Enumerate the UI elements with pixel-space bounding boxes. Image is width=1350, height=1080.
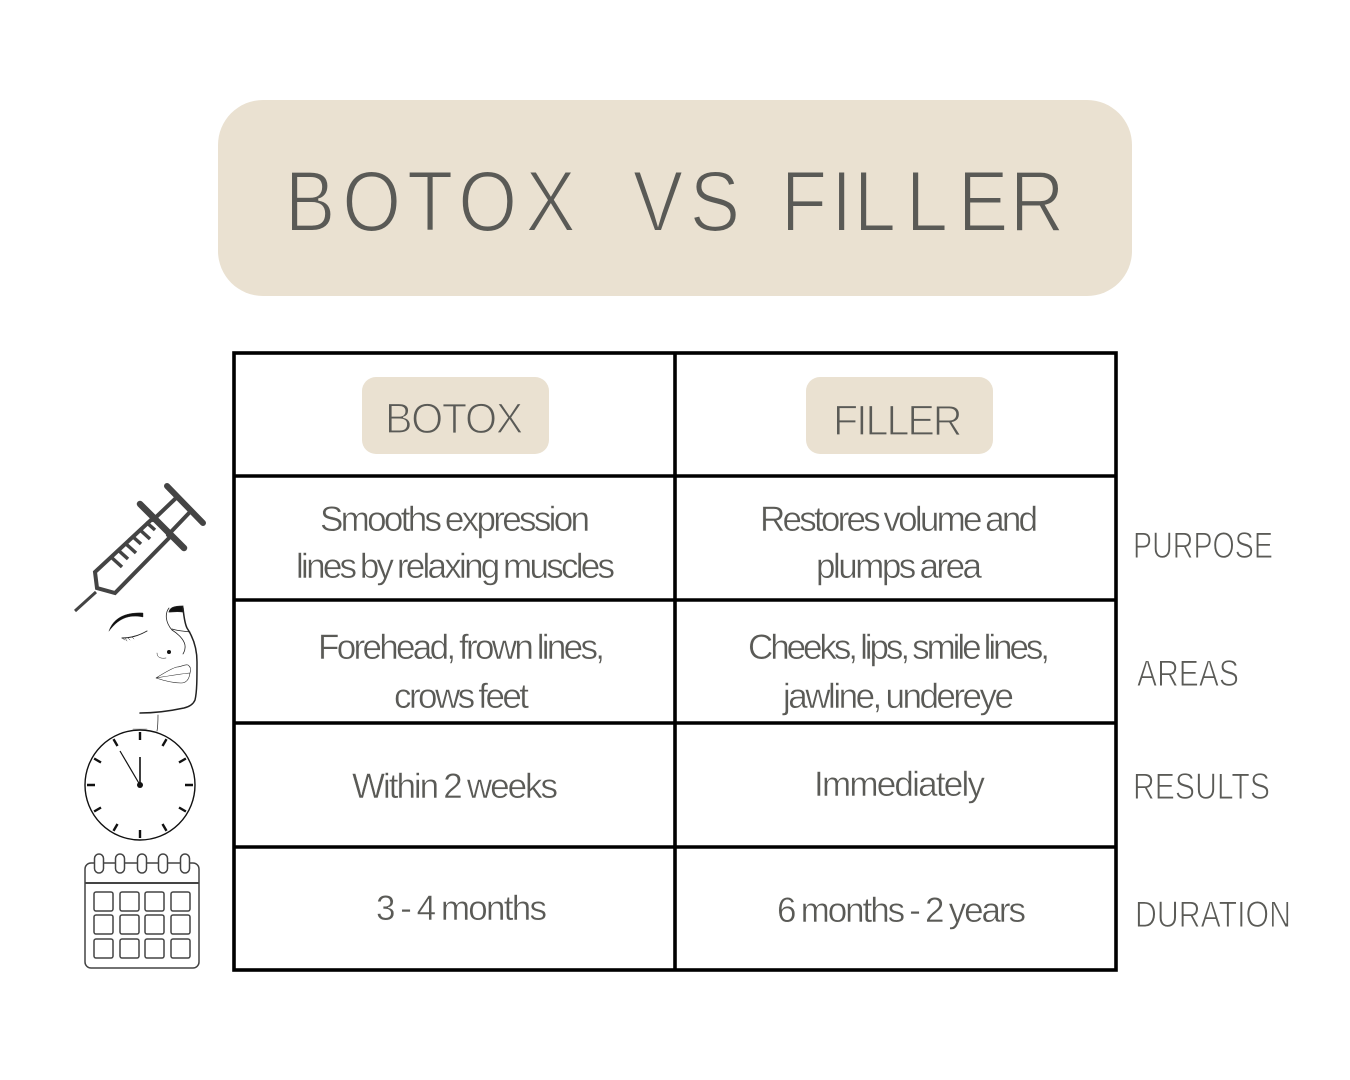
filler purpose text: plumps area <box>816 547 983 586</box>
row label: purpose: PURPOSE <box>1133 525 1273 566</box>
botox areas text <box>318 628 605 716</box>
icon: calendar <box>85 854 199 968</box>
column heading: botox <box>362 377 549 454</box>
filler areas text <box>748 628 1050 716</box>
filler purpose text: Restores volume and <box>760 500 1038 539</box>
botox areas text: Forehead, frown lines, <box>318 628 605 667</box>
icon: face <box>109 606 197 731</box>
row label: areas: AREAS <box>1137 653 1239 694</box>
botox duration text: 3 - 4 months <box>376 889 547 928</box>
row label: results: RESULTS <box>1133 766 1270 807</box>
column heading: filler: FILLER <box>833 396 963 444</box>
botox results text: Within 2 weeks <box>352 767 558 806</box>
filler areas text: jawline, undereye <box>782 677 1014 716</box>
botox purpose text: lines by relaxing muscles <box>296 547 615 586</box>
filler areas text: Cheeks, lips, smile lines, <box>748 628 1050 667</box>
row label: duration: DURATION <box>1135 894 1291 935</box>
botox purpose text: Smooths expression <box>320 500 590 539</box>
title banner <box>218 100 1132 296</box>
botox areas text: crows feet <box>394 677 529 716</box>
column heading: botox: BOTOX <box>385 394 523 442</box>
icon: clock <box>85 730 195 840</box>
icon: syringe <box>75 486 203 611</box>
filler results text: Immediately <box>814 765 986 804</box>
filler duration text: 6 months - 2 years <box>777 891 1026 930</box>
title: BOTOX VS FILLER <box>285 155 1065 250</box>
botox purpose text <box>296 500 615 586</box>
filler purpose text <box>760 500 1038 586</box>
column heading: filler <box>806 377 993 454</box>
comparison table grid <box>234 353 1116 970</box>
